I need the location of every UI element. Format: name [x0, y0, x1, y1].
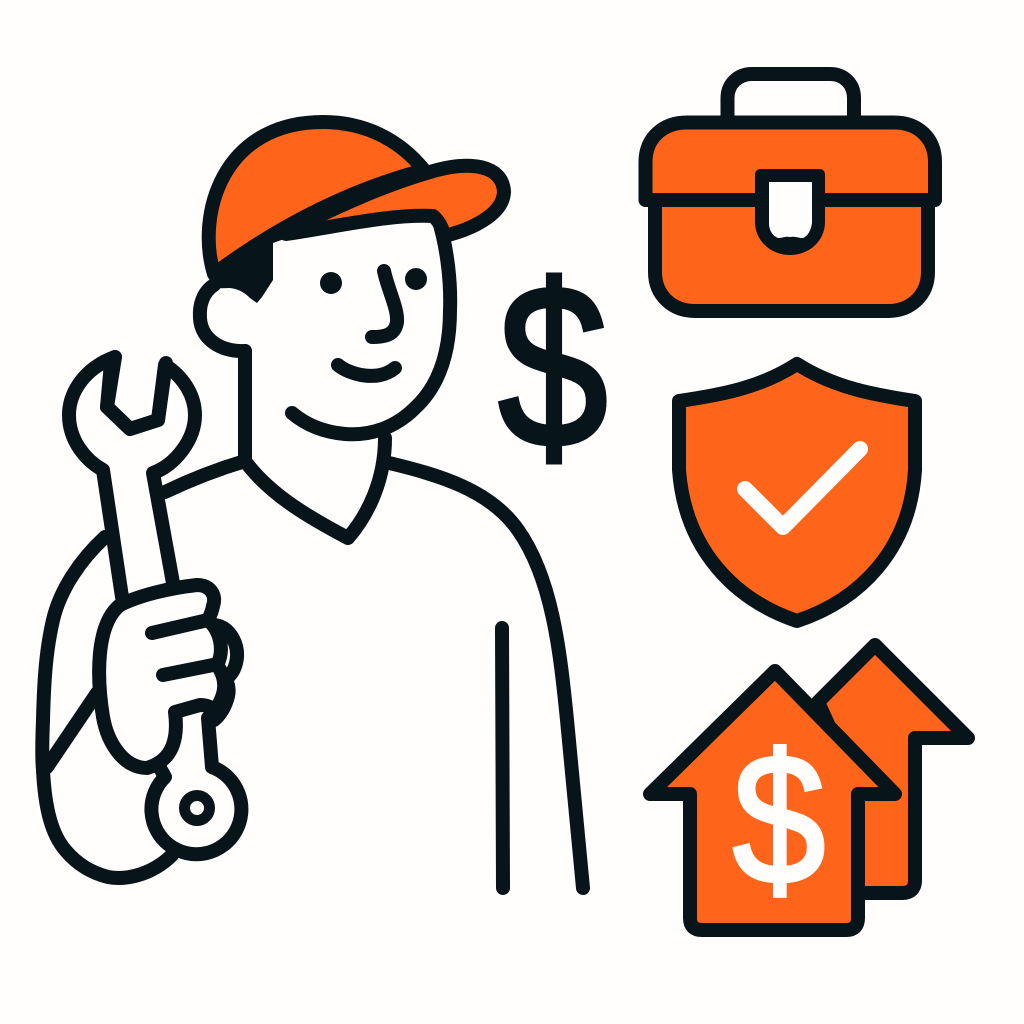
worker figure	[42, 122, 583, 888]
face	[320, 268, 427, 376]
back arrow	[818, 645, 968, 893]
front arrow	[650, 671, 895, 930]
head	[200, 218, 450, 538]
cap	[208, 122, 504, 303]
white dollar sign: $	[733, 717, 825, 923]
hand	[99, 585, 237, 768]
torso and arm	[42, 461, 583, 888]
icon: rising house arrows	[650, 645, 968, 930]
icon: shield with check	[679, 364, 915, 621]
icon: toolbox	[646, 74, 935, 311]
dollar sign: $	[498, 238, 608, 496]
wrench	[69, 357, 241, 854]
